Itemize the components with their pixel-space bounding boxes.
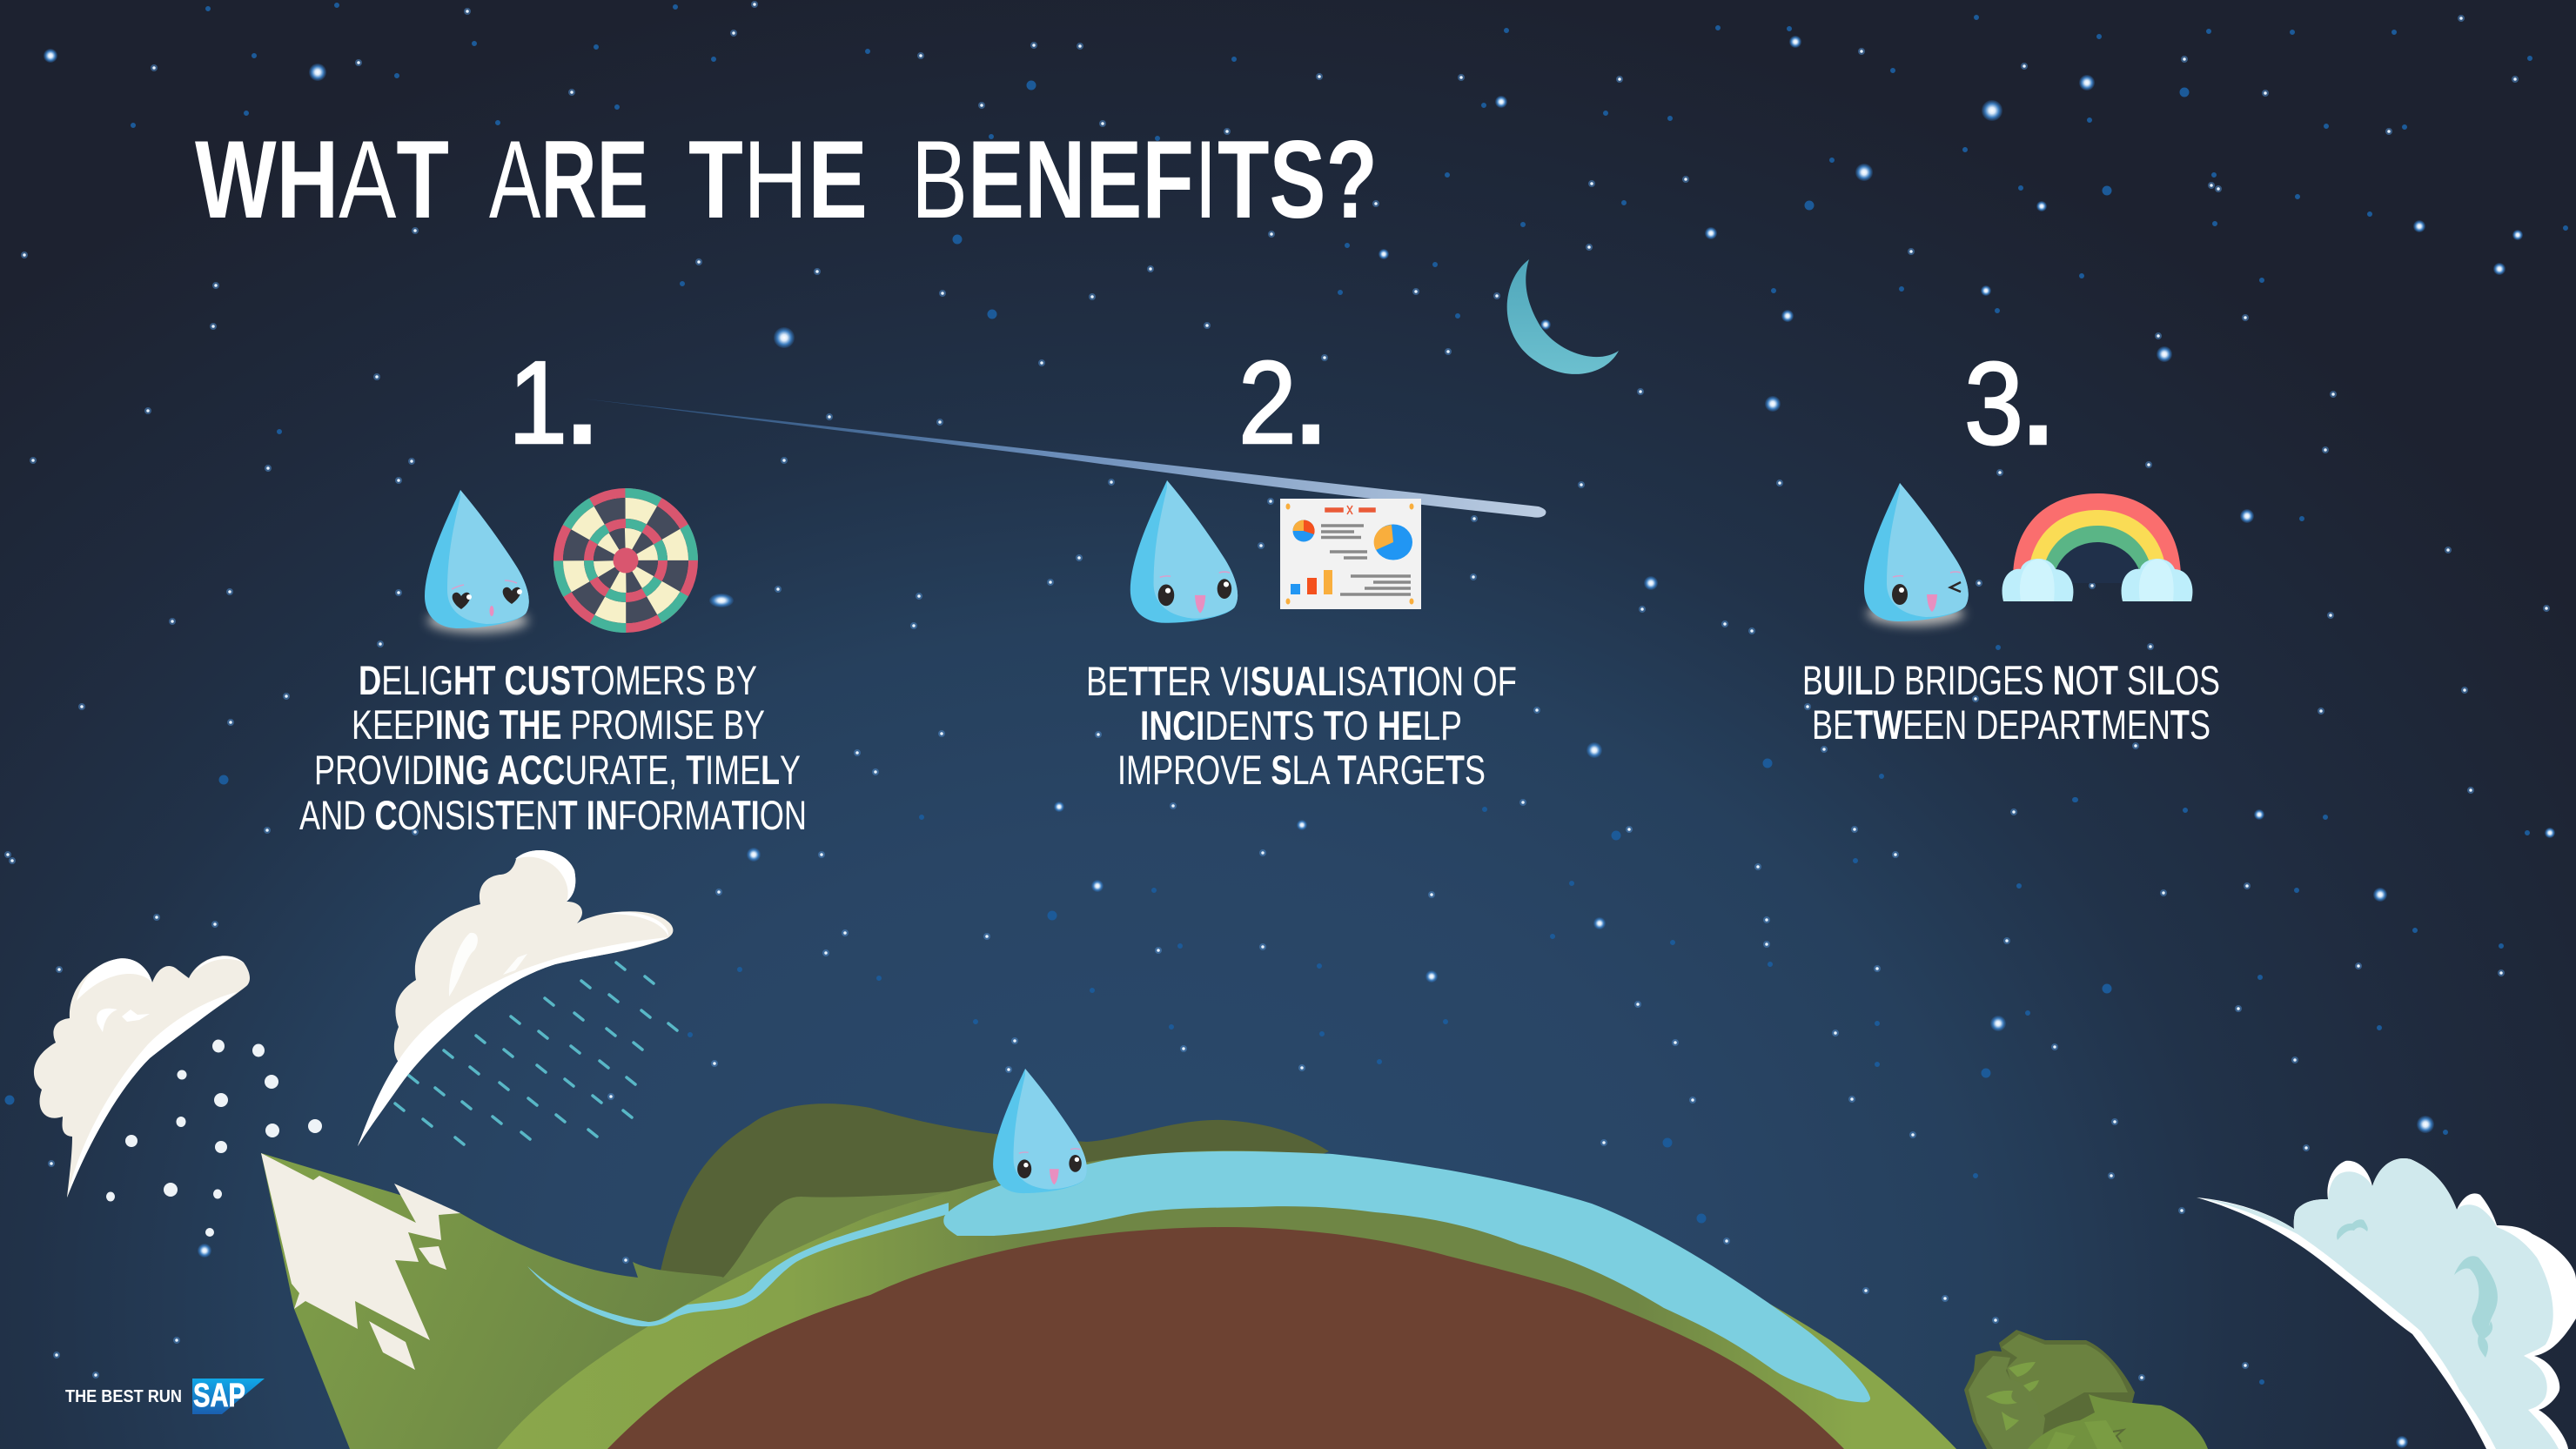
title	[195, 117, 1378, 241]
icon: rainbow with clouds	[2002, 493, 2192, 601]
description 2: INCIDENTS TO HELP	[1140, 702, 1462, 748]
snow-capped mountain	[261, 1153, 783, 1449]
icon: water drop with heart eyes	[425, 490, 529, 633]
description 2: IMPROVE SLA TARGETS	[1117, 747, 1486, 793]
benefit 1	[299, 337, 807, 838]
drop sitting on the planet	[993, 1069, 1087, 1193]
benefit 2	[1086, 337, 1517, 793]
number 1: 1.	[508, 337, 597, 468]
description 3: BUILD BRIDGES NOT SILOS	[1802, 657, 2220, 703]
description 1: AND CONSISTENT INFORMATION	[299, 792, 807, 838]
snowflakes	[106, 1039, 322, 1237]
river	[527, 1203, 949, 1326]
lake	[943, 1151, 1870, 1402]
description 3: BETWEEN DEPARTMENTS	[1812, 701, 2210, 748]
tree	[1964, 1330, 2208, 1449]
planet soil	[607, 1227, 1844, 1449]
description 2: BETTER VISUALISATION OF	[1086, 658, 1517, 704]
title: BENEFITS?	[911, 117, 1378, 241]
benefit 3	[1802, 338, 2220, 748]
description 1: KEEPING THE PROMISE BY	[352, 701, 765, 748]
icon: winking water drop	[1864, 483, 1969, 626]
right rain cloud	[358, 850, 673, 1146]
description 3	[1802, 657, 2220, 748]
logo badge	[192, 1379, 265, 1414]
icon: report with charts	[1280, 499, 1421, 609]
title: WHAT	[195, 117, 449, 241]
description 1: DELIGHT CUSTOMERS BY	[359, 657, 757, 703]
logo text: SAP	[193, 1378, 245, 1414]
number 2: 2.	[1238, 337, 1325, 468]
icon: smiling water drop	[1130, 480, 1238, 623]
tagline: THE BEST RUN	[65, 1387, 182, 1406]
planet green surface	[497, 1150, 1956, 1449]
description 1: PROVIDING ACCURATE, TIMELY	[314, 747, 801, 793]
description 2	[1086, 658, 1517, 793]
rain drops	[395, 963, 677, 1144]
icon: dartboard	[559, 493, 693, 628]
title: THE	[688, 117, 868, 241]
left snow cloud	[34, 956, 250, 1197]
back hill	[661, 1104, 1329, 1305]
number 3: 3.	[1964, 338, 2053, 469]
title: ARE	[489, 117, 648, 241]
SAP logo and tagline	[65, 1378, 265, 1414]
middle hill	[721, 1184, 1027, 1314]
right cloud	[2197, 1158, 2576, 1449]
shooting star	[582, 399, 1546, 518]
crescent moon	[1507, 259, 1619, 374]
description 1	[299, 657, 807, 838]
